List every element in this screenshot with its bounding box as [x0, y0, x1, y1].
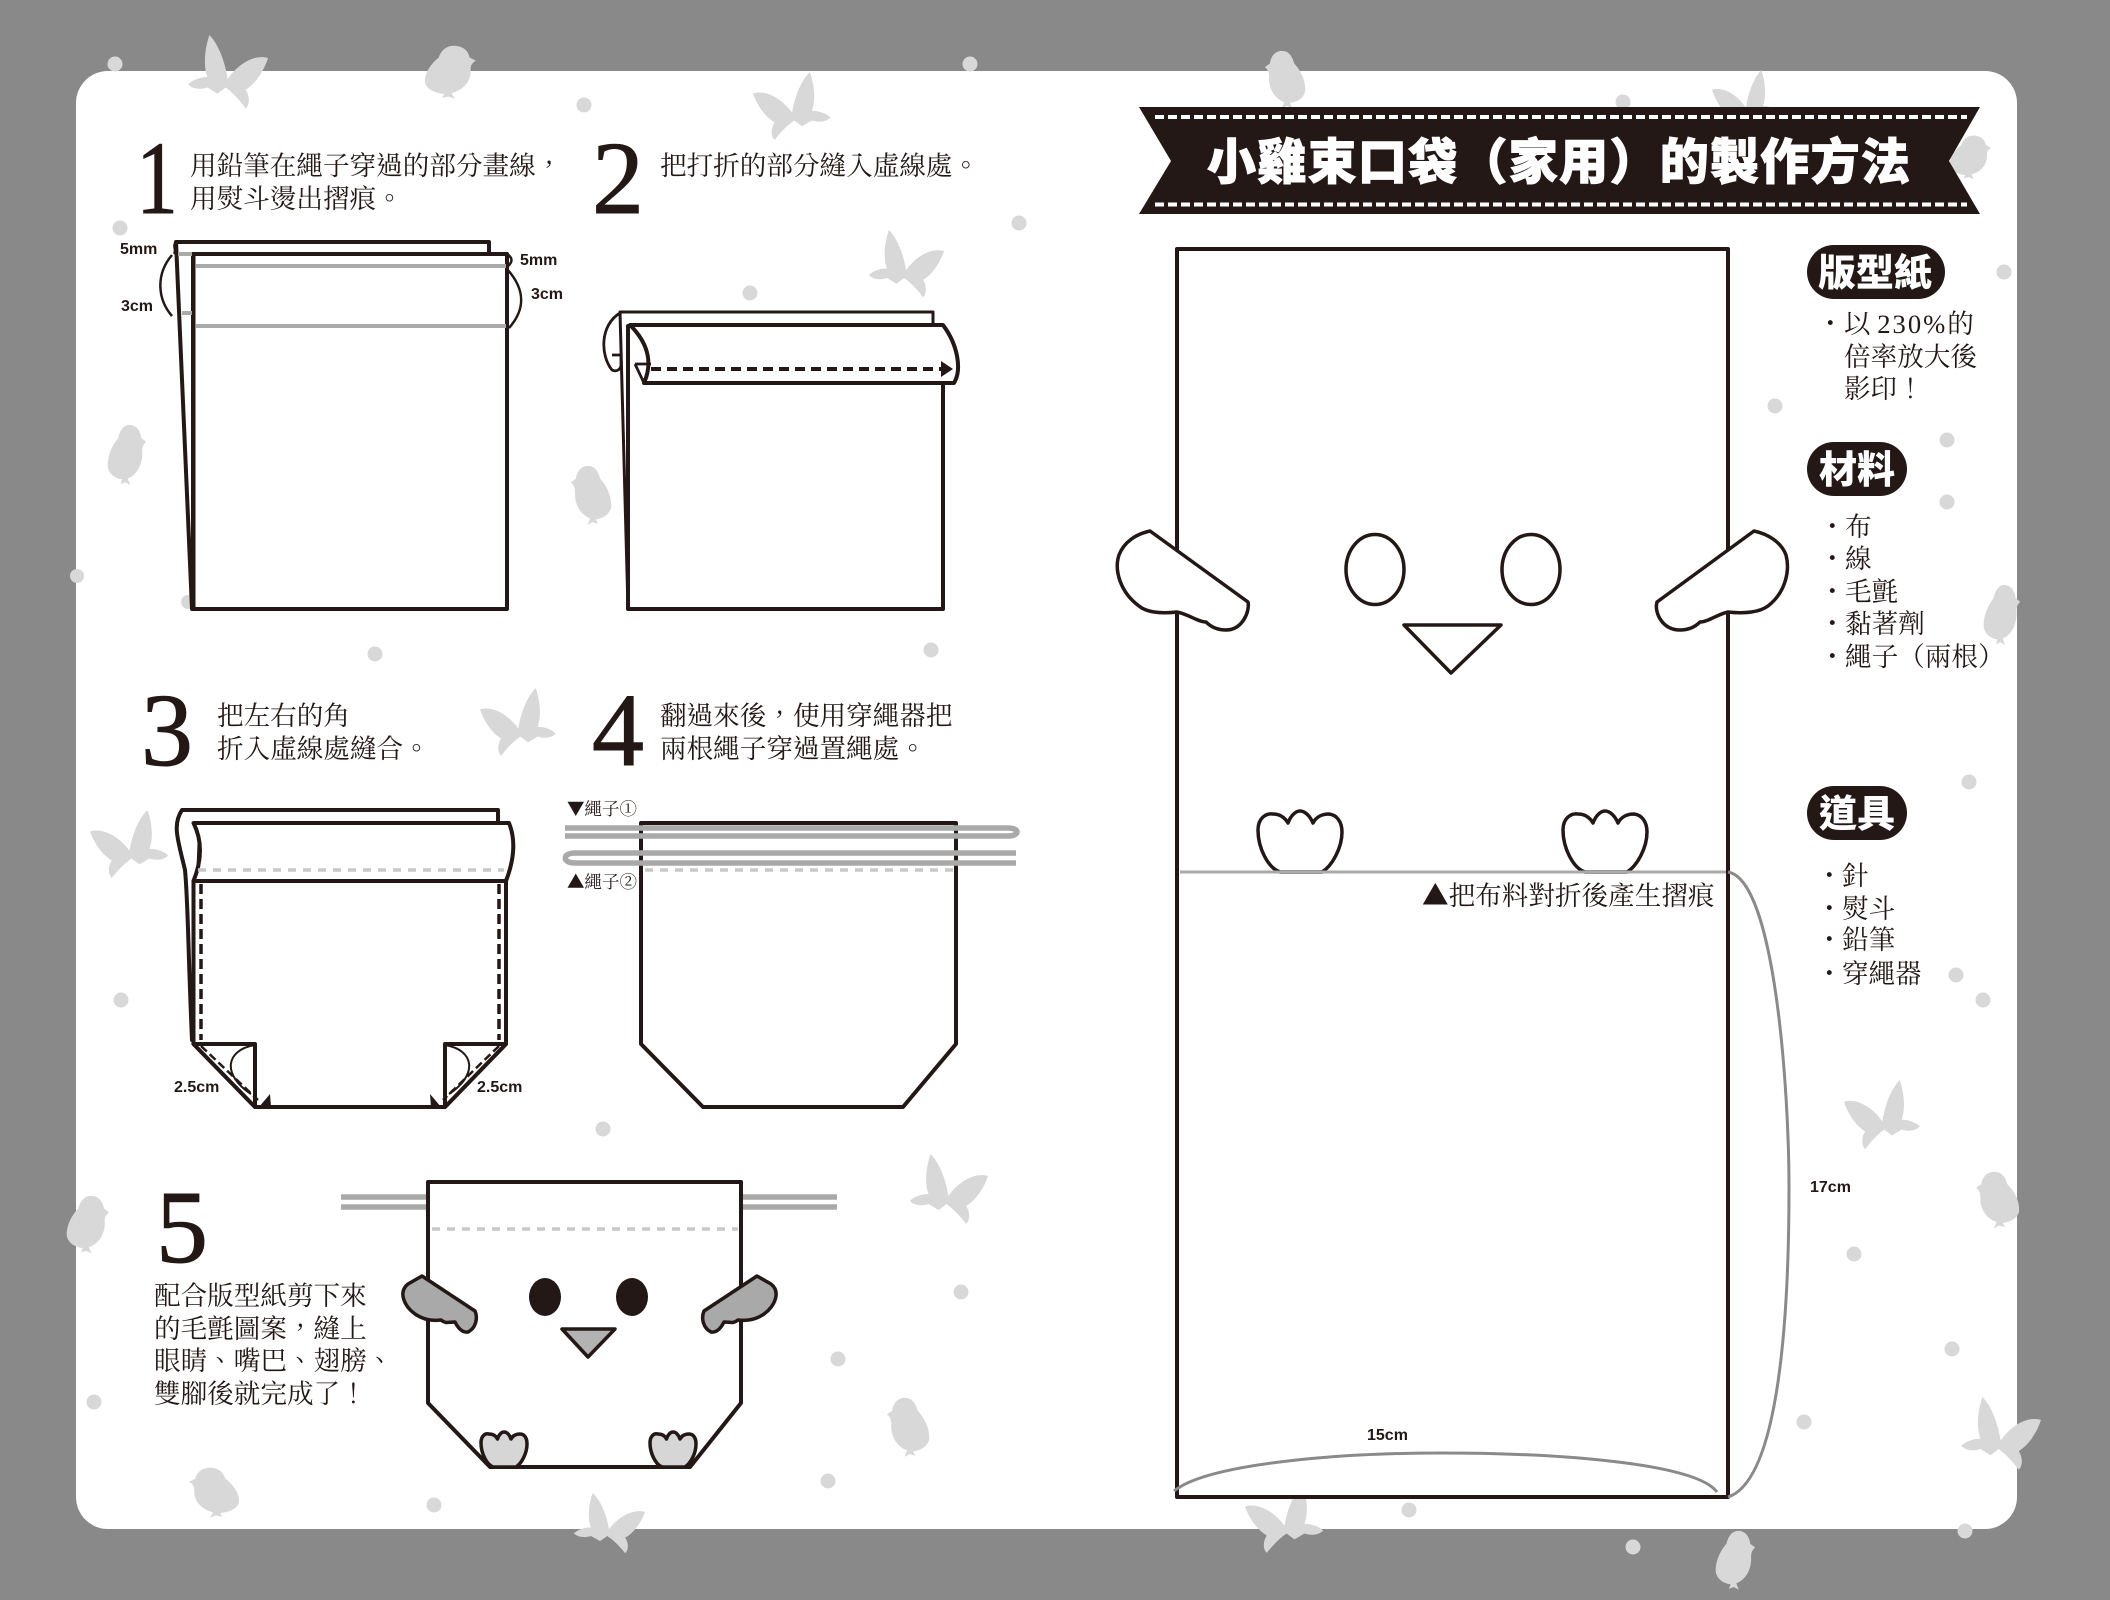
materials list: 布: [1845, 512, 1872, 542]
pattern: left wing: [1117, 531, 1248, 630]
tools list: ・: [1816, 861, 1843, 891]
step number 1: 1: [136, 121, 178, 236]
step 5 instructions: 的毛氈圖案，縫上: [154, 1314, 367, 1344]
section: materials: [1807, 442, 2005, 672]
step 1 instructions: 用熨斗燙出摺痕。: [190, 184, 403, 214]
step 5 instructions: 配合版型紙剪下來: [154, 1281, 367, 1311]
heading pill: 道具: [1807, 786, 1907, 840]
tools list: ・: [1816, 894, 1843, 924]
pattern sheet: [1177, 249, 1728, 1497]
materials list: ・: [1819, 609, 1846, 639]
step 4 instructions: [660, 701, 953, 764]
step 1 diagram: folded fabric with marked lines: 3cm: [121, 298, 153, 315]
step 2 diagram: rolled hem with stitch arrow: [604, 312, 958, 609]
step 5 instructions: 雙腳後就完成了！: [154, 1379, 367, 1409]
step number 5: 5: [156, 1170, 208, 1285]
step 1 diagram: folded fabric with marked lines: 5mm: [520, 252, 557, 269]
tools list: 穿繩器: [1842, 959, 1922, 989]
label: 17cm: 17cm: [1810, 1179, 1851, 1196]
icon: right wing: [703, 1276, 776, 1332]
step number 2: 2: [592, 121, 644, 236]
title text: 小雞束口袋（家用）的製作方法: [1207, 135, 1911, 190]
heading pill: 版型紙: 版型紙: [1818, 253, 1932, 295]
heading pill: 材料: 材料: [1819, 450, 1895, 492]
step number 3: 3: [141, 673, 193, 788]
pattern: feet: [1258, 811, 1647, 872]
icon: left wing: [403, 1276, 476, 1332]
step 4 instructions: 翻過來後，使用穿繩器把: [660, 701, 953, 731]
step 1 instructions: [190, 151, 562, 214]
tools list: 鉛筆: [1842, 925, 1895, 955]
materials list: ・: [1819, 512, 1846, 542]
heading pill: 版型紙: [1807, 245, 1945, 299]
label: 15cm: 15cm: [1367, 1427, 1408, 1444]
step 3 diagram: corners folded and stitched: [174, 810, 522, 1107]
step 5 instructions: 眼睛、嘴巴、翅膀、: [154, 1346, 393, 1376]
materials list: ・: [1819, 642, 1846, 672]
materials list: ・: [1819, 577, 1846, 607]
step 4 diagram: bag with two cords: ▲繩子②: [567, 869, 637, 894]
panel: step 4: [565, 673, 1017, 1107]
materials list: 毛氈: [1845, 577, 1898, 607]
heading pill: 材料: [1807, 442, 1907, 496]
step 3 instructions: 把左右的角: [217, 701, 350, 731]
text: enlargement note: [1817, 309, 1977, 404]
section: tools: [1807, 786, 1922, 989]
materials list: [1819, 512, 2005, 672]
dimension: 17cm curve: [1728, 872, 1789, 1497]
text: enlargement note: ・: [1817, 309, 1844, 339]
panel: step 3: [141, 673, 522, 1107]
title banner: [1139, 107, 1980, 214]
materials list: 黏著劑: [1845, 609, 1925, 639]
panel: step 2: [592, 121, 979, 609]
step 3 instructions: [217, 701, 430, 764]
text: enlargement note: 以 230%的: [1844, 309, 1974, 339]
step 1 diagram: folded fabric with marked lines: 3cm: [531, 286, 563, 303]
step 4 diagram: bag with two cords: [565, 796, 1017, 1107]
step 1 instructions: 用鉛筆在繩子穿過的部分畫線，: [190, 151, 562, 181]
pattern: eyes: [1346, 534, 1560, 604]
step 1 diagram: folded fabric with marked lines: 5mm: [120, 241, 157, 258]
icon: eyes: [529, 1278, 648, 1316]
dimension: 15cm curve: [1174, 1453, 1717, 1492]
icon: beak: [562, 1329, 615, 1357]
text: enlargement note: 倍率放大後: [1844, 342, 1977, 372]
fold note: ▲把布料對折後產生摺痕: [1422, 874, 1715, 913]
step 4 diagram: bag with two cords: ▼繩子①: [567, 796, 637, 821]
step 3 instructions: 折入虛線處縫合。: [217, 734, 430, 764]
step 5 diagram: finished chick bag: [341, 1182, 837, 1467]
step 3 diagram: corners folded and stitched: 2.5cm: [477, 1079, 522, 1096]
pattern: right wing: [1656, 531, 1787, 630]
section: pattern paper: [1807, 245, 1977, 404]
pattern: beak: [1404, 625, 1501, 673]
tools list: ・: [1816, 959, 1843, 989]
step number 4: 4: [592, 673, 644, 788]
text: enlargement note: 影印！: [1844, 374, 1924, 404]
step 1 diagram: folded fabric with marked lines: [120, 241, 563, 609]
tools list: 針: [1842, 861, 1869, 891]
pattern diagram: [1117, 249, 1851, 1497]
panel: step 1: [120, 121, 563, 609]
icon: feet: [481, 1432, 696, 1467]
step 2 instructions: 把打折的部分縫入虛線處。: [660, 151, 979, 181]
materials list: ・: [1819, 544, 1846, 574]
fold line: [1180, 870, 1726, 874]
tools list: ・: [1816, 925, 1843, 955]
tools list: 熨斗: [1842, 894, 1895, 924]
step 5 instructions: [154, 1281, 393, 1409]
materials list: 線: [1845, 544, 1872, 574]
step 3 diagram: corners folded and stitched: 2.5cm: [174, 1079, 219, 1096]
step 4 instructions: 兩根繩子穿過置繩處。: [660, 734, 926, 764]
heading pill: 道具: 道具: [1819, 794, 1895, 836]
panel: step 5: [154, 1170, 837, 1467]
tools list: [1816, 861, 1922, 989]
materials list: 繩子（兩根）: [1845, 642, 2005, 672]
